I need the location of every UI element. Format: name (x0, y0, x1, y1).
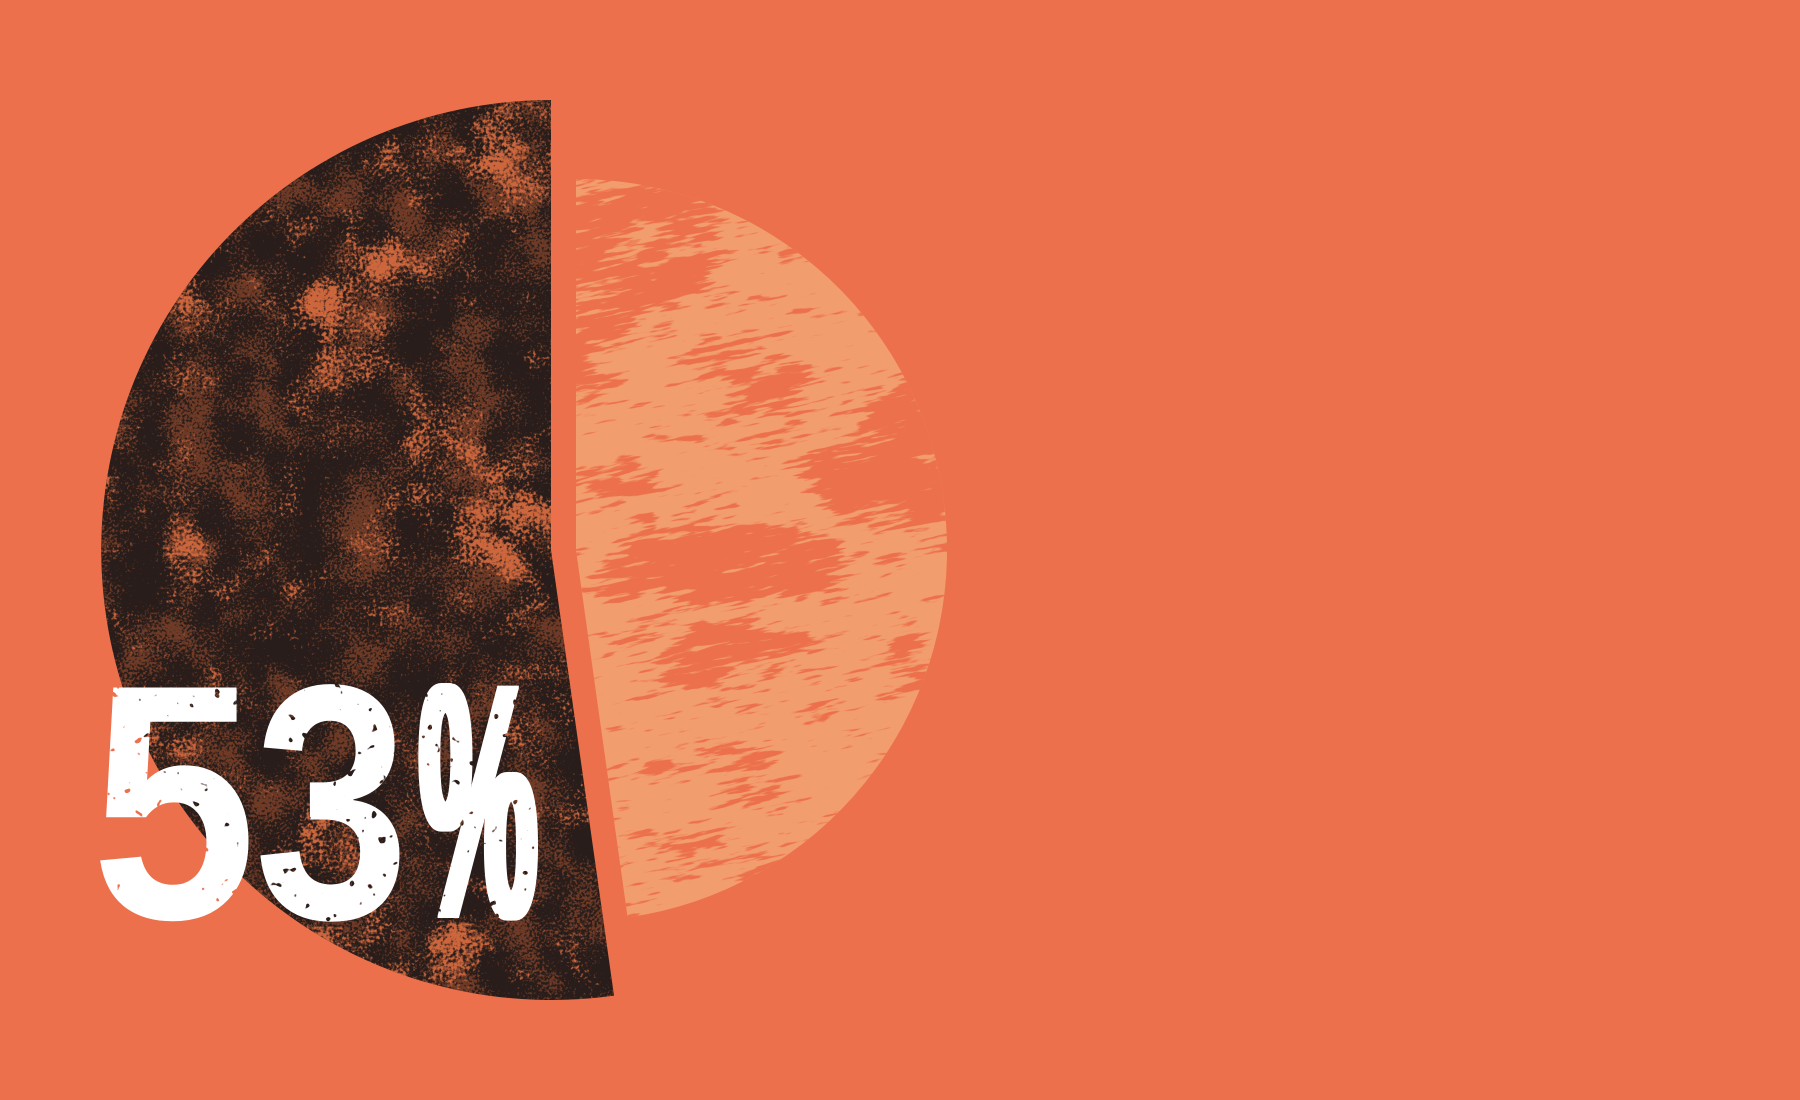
pie slice: dark 53 percent (90, 90, 630, 1010)
statistic: 53 percent (91, 613, 538, 990)
statistic: 53 percent: 3 (254, 616, 410, 990)
infographic canvas (100, 100, 947, 1000)
statistic: 53 percent: 5 (91, 616, 257, 990)
statistic: 53 percent: % (419, 613, 538, 988)
pie slice: light 47 percent (576, 179, 947, 918)
